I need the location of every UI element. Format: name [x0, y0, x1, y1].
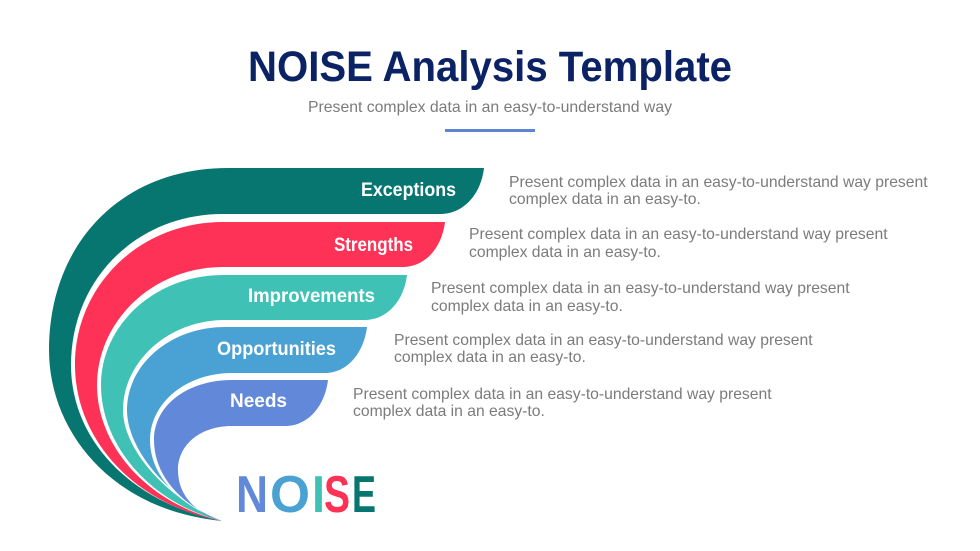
NOISE wordmark [236, 466, 376, 524]
band: Strengths [71, 214, 445, 521]
description: Improvements: complex data in an easy-to. [431, 298, 623, 315]
NOISE wordmark: I [312, 466, 325, 524]
description: Strengths: Present complex data in an easy-to-understand way present [469, 226, 888, 243]
band: Needs [150, 373, 328, 521]
band: Improvements: Improvements [248, 286, 375, 307]
title: NOISE Analysis Template [248, 43, 732, 91]
subtitle: Present complex data in an easy-to-understand way [308, 99, 672, 116]
NOISE wordmark: S [324, 466, 350, 524]
band: Strengths: Strengths [334, 235, 413, 256]
description: Exceptions: Present complex data in an easy-to-understand way present [509, 174, 928, 191]
funnel of curved bands [49, 168, 484, 521]
band: Improvements [97, 267, 407, 521]
NOISE wordmark: N [236, 466, 268, 524]
description: Exceptions: complex data in an easy-to. [509, 191, 701, 208]
band: Exceptions: Exceptions [361, 180, 456, 201]
description: Needs: Present complex data in an easy-to-understand way present [353, 386, 772, 403]
description: Needs: complex data in an easy-to. [353, 403, 545, 420]
band: Exceptions [49, 168, 484, 521]
title underline accent [445, 129, 535, 132]
NOISE wordmark: E [352, 466, 376, 524]
description: Improvements: Present complex data in an easy-to-understand way present [431, 280, 850, 297]
description: Opportunities: Present complex data in an easy-to-understand way present [394, 332, 813, 349]
band: Opportunities: Opportunities [217, 339, 336, 360]
band: Needs: Needs [230, 391, 287, 412]
description: Opportunities: complex data in an easy-to. [394, 349, 586, 366]
description: Strengths: complex data in an easy-to. [469, 244, 661, 261]
NOISE wordmark: O [270, 466, 310, 524]
band: Opportunities [123, 320, 367, 521]
